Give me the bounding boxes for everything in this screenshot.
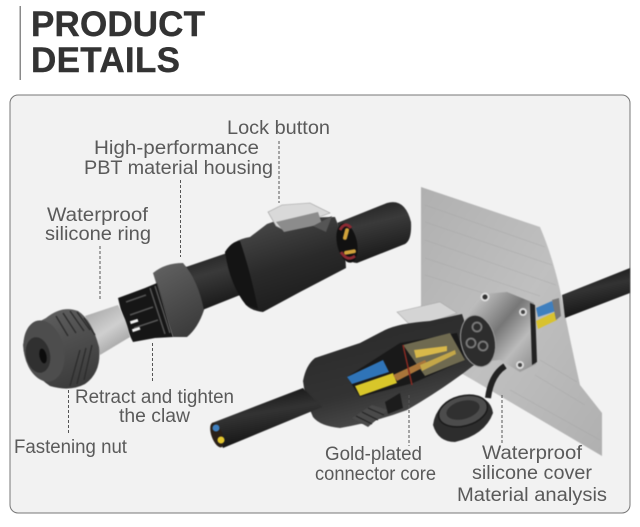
waterproof silicone ring [85, 305, 130, 355]
label: silicone ring: Waterproof [47, 205, 149, 226]
label: silicone cover: Waterproof [482, 443, 583, 464]
brushed metal mounting plate [421, 187, 602, 456]
cutaway with wires and gold-plated core [347, 333, 465, 397]
rear wires [536, 298, 561, 329]
panel socket: metal flange [456, 292, 537, 372]
rear cable [562, 268, 630, 318]
label: housing [84, 138, 273, 179]
exploded connector: front plug with gold pins [333, 202, 411, 265]
label: silicone ring: silicone ring [45, 224, 151, 245]
label: connector core [315, 444, 436, 485]
label: connector core: connector core [315, 464, 436, 485]
exploded connector: housing [225, 217, 346, 312]
title [20, 5, 205, 80]
label: fastening nut: Fastening nut [14, 437, 128, 458]
panel: product diagram [10, 95, 630, 513]
lock button [268, 203, 332, 232]
label: connector core: Gold-plated [325, 444, 422, 465]
assembled connector: lock button [397, 302, 457, 328]
label: claw: Retract and tighten [75, 387, 234, 408]
label: claw [75, 387, 234, 427]
front cable with wire ends [207, 388, 322, 449]
label: housing: High-performance [94, 138, 259, 159]
assembled connector: body [303, 314, 478, 428]
exploded connector: flange [153, 263, 204, 337]
label: silicone cover [457, 443, 607, 506]
grip ribs on assembled connector [352, 393, 403, 427]
label: silicone ring [45, 205, 151, 245]
callout lines [68, 141, 502, 446]
exploded connector: main tube [183, 252, 245, 311]
label: lock button: Lock button [227, 118, 330, 139]
label: silicone cover: silicone cover [472, 463, 593, 484]
waterproof silicone cover with strap [433, 366, 505, 442]
fastening nut [18, 309, 99, 389]
title: PRODUCT [31, 5, 205, 44]
label: housing: PBT material housing [84, 158, 273, 179]
label: claw: the claw [119, 406, 190, 427]
exploded connector: retracting claw [118, 283, 173, 342]
title: DETAILS [31, 41, 180, 80]
label: silicone cover: Material analysis [457, 485, 607, 506]
